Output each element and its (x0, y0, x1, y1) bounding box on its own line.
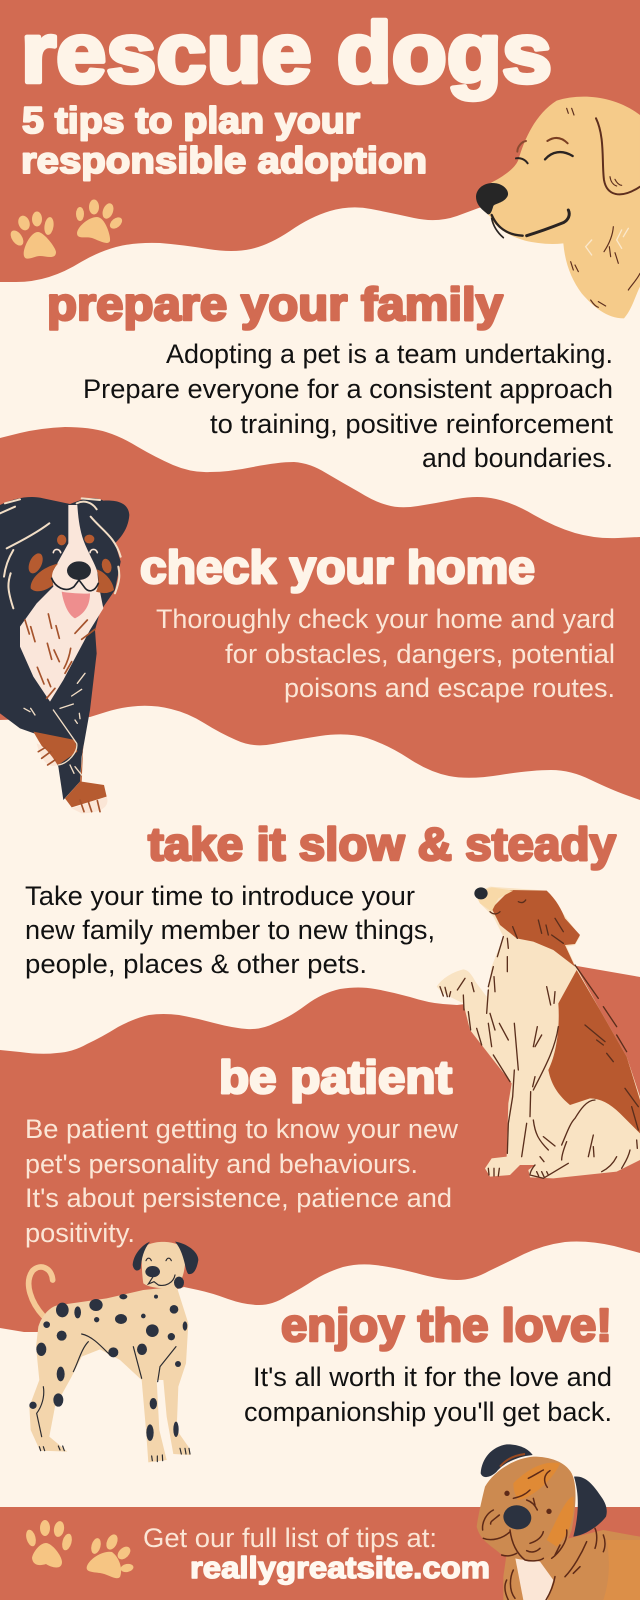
text block: be patient (25, 1114, 459, 1248)
text block: be patient: pet's personality and behaviours. (25, 1149, 418, 1179)
footer text (143, 1523, 490, 1585)
illustration: bernese dog (0, 497, 129, 813)
heading: prepare your family: prepare your family (47, 278, 503, 330)
top header wave band (0, 0, 640, 282)
text block: take it slow (25, 881, 435, 979)
text block: prepare your family: Prepare everyone for a consistent approach (83, 374, 613, 404)
illustration: collie dog (437, 887, 640, 1178)
illustration: dalmatian dog (29, 1242, 198, 1462)
footer text: Get our full list of tips at: (143, 1523, 437, 1553)
subtitle: 5 tips to plan your (22, 100, 360, 141)
icon: footer paw print left (24, 1520, 74, 1568)
heading: take it slow and steady: take it slow & steady (148, 818, 616, 870)
heading: enjoy the love: enjoy the love! (281, 1299, 612, 1351)
heading: check your home: check your home (140, 541, 535, 593)
text block: enjoy the love: It's all worth it for the love and (253, 1362, 612, 1392)
subtitle: responsible adoption (21, 140, 427, 181)
heading: be patient: be patient (219, 1051, 452, 1103)
text block: check your home: Thoroughly check your home and yard (156, 604, 615, 634)
panel: check your home wave band (0, 427, 640, 800)
text block: be patient: positivity. (25, 1218, 135, 1248)
text block: prepare your family: and boundaries. (422, 443, 613, 473)
text block: prepare your family: to training, positive reinforcement (210, 409, 614, 439)
title: rescue dogs (21, 6, 552, 101)
text block: take it slow: Take your time to introduce your (25, 881, 415, 911)
text block: check your home: poisons and escape routes. (284, 673, 615, 703)
text block: take it slow: new family member to new things, (25, 915, 435, 945)
text block: enjoy the love (244, 1362, 612, 1427)
icon: paw print right (76, 200, 124, 243)
text block: prepare your family (83, 339, 614, 473)
icon: footer paw print right (87, 1533, 134, 1578)
footer text: reallygreatsite.com (190, 1550, 490, 1585)
text block: check your home (156, 604, 615, 703)
subtitle (21, 100, 427, 181)
text block: take it slow: people, places & other pets. (25, 949, 367, 979)
text block: be patient: Be patient getting to know your new (25, 1114, 459, 1144)
panel: be patient wave band (0, 966, 640, 1332)
text block: enjoy the love: companionship you'll get back. (244, 1397, 612, 1427)
icon: paw print left (8, 212, 56, 259)
text block: check your home: for obstacles, dangers, potential (225, 639, 615, 669)
footer band (0, 1507, 640, 1600)
text block: prepare your family: Adopting a pet is a team undertaking. (166, 339, 613, 369)
illustration: golden dog (476, 97, 640, 318)
text block: be patient: It's about persistence, patience and (25, 1183, 452, 1213)
illustration: boxer dog (477, 1444, 640, 1600)
